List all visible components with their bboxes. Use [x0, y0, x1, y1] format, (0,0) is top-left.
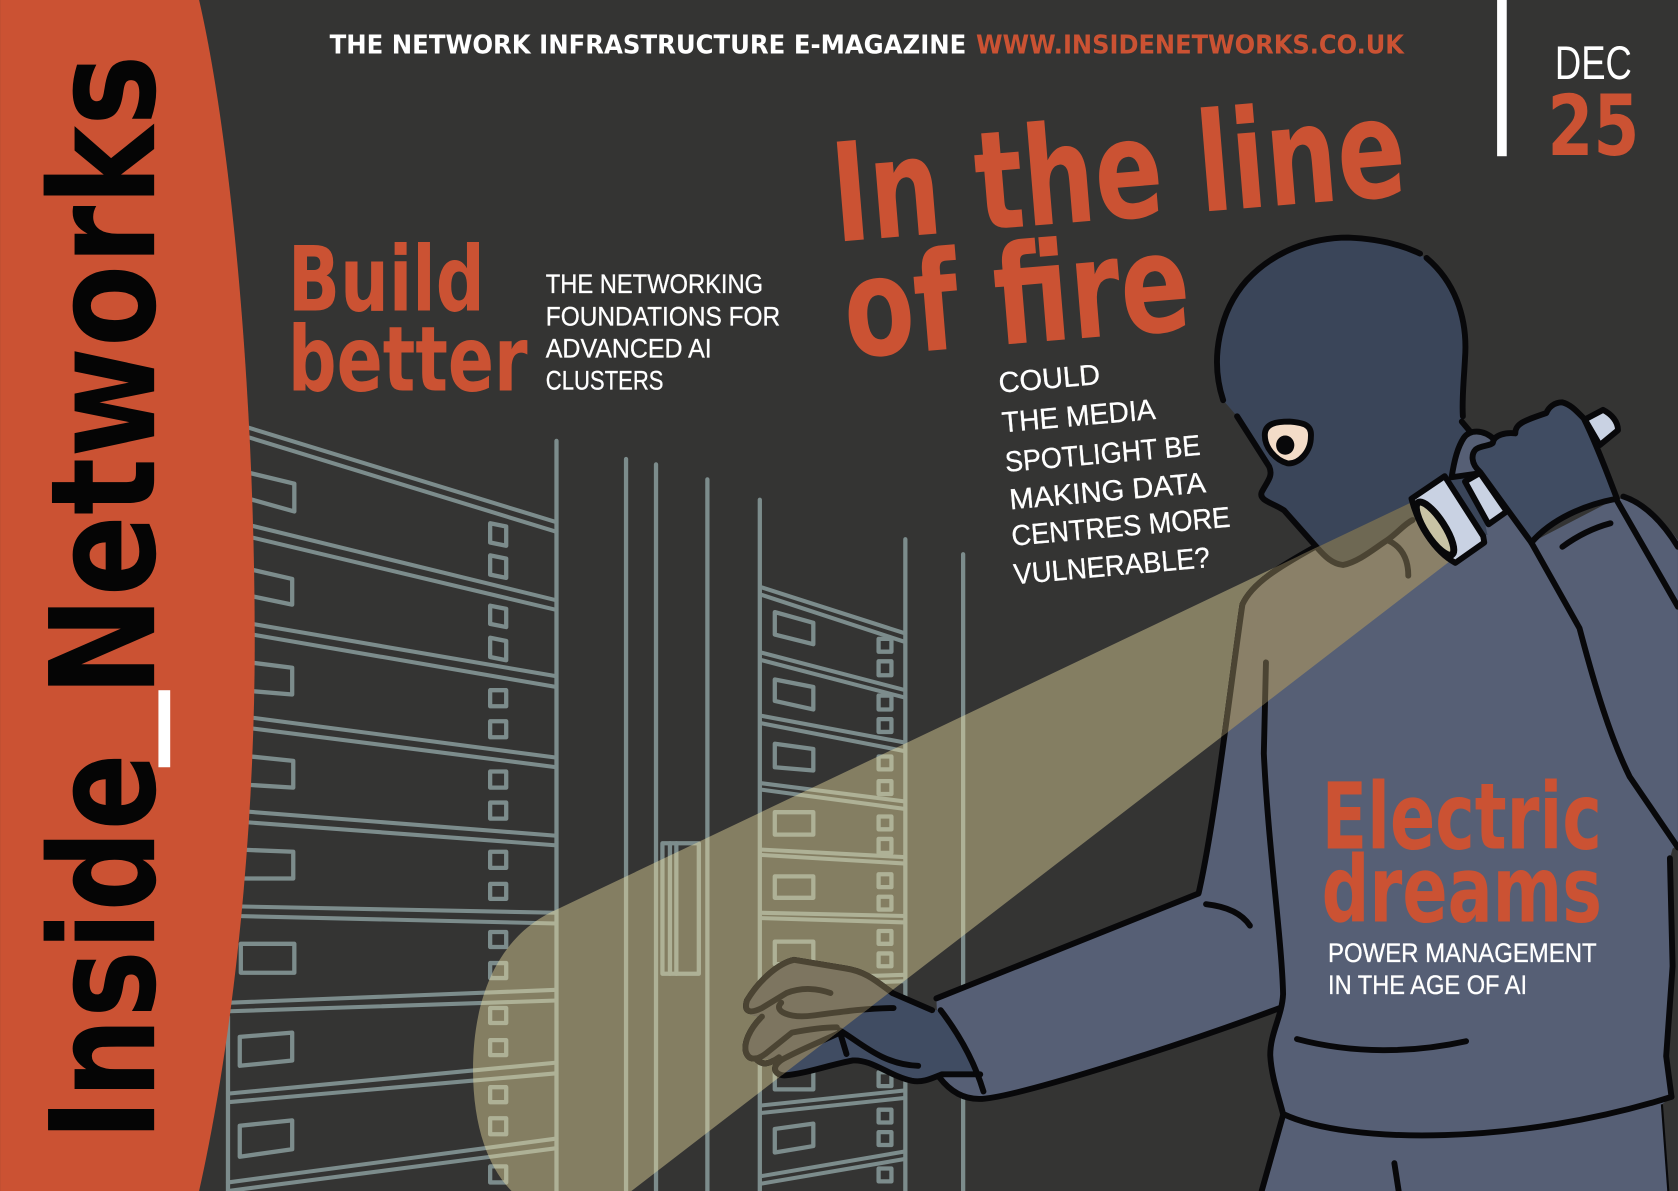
masked burglar figure — [745, 238, 1678, 1191]
feature strapline: AI clusters: FOUNDATIONS FOR — [546, 301, 780, 331]
torch light beam — [473, 501, 1453, 1191]
header strapline: WWW.INSIDENETWORKS.CO.UK — [976, 31, 1405, 61]
cover story strapline: MAKING DATA — [1008, 467, 1208, 516]
feature strapline: AI clusters: THE NETWORKING — [546, 269, 763, 299]
gloved fist, raised sleeve and torch — [1410, 402, 1618, 563]
feature: Build better: Build — [288, 228, 485, 332]
feature strapline: AI clusters: CLUSTERS — [546, 366, 664, 396]
masthead: Inside_Networks — [20, 55, 189, 1141]
feature strapline: AI clusters — [546, 269, 780, 396]
feature strapline: power management: POWER MANAGEMENT — [1328, 938, 1597, 968]
left server rack — [228, 427, 556, 1191]
feature: Build better — [288, 228, 528, 413]
figure lit by the beam — [742, 503, 1448, 1078]
cover headline: of fire — [837, 203, 1196, 390]
header strapline — [330, 31, 1405, 61]
issue date: 25 — [1547, 78, 1639, 175]
cover story strapline: COULD — [997, 359, 1101, 400]
cover story strapline: THE MEDIA — [1001, 394, 1158, 439]
cover story strapline: SPOTLIGHT BE — [1004, 430, 1202, 479]
red masthead panel — [0, 0, 255, 1191]
cover headline: In the line — [825, 69, 1411, 275]
centre uprights and door handle — [626, 459, 707, 1191]
masthead: Inside_Networks: Inside — [20, 753, 189, 1141]
feature: Electric dreams — [1322, 764, 1602, 943]
cover story strapline: CENTRES MORE — [1010, 502, 1231, 553]
header strapline: THE NETWORK INFRASTRUCTURE E-MAGAZINE — [330, 31, 966, 61]
feature: Build better: better — [288, 309, 528, 413]
issue date — [1497, 0, 1639, 175]
feature strapline: power management — [1328, 938, 1597, 1000]
issue date: DEC — [1555, 36, 1632, 89]
right server rack — [760, 500, 963, 1191]
cover story strapline: VULNERABLE? — [1012, 542, 1211, 591]
cover headline — [825, 69, 1411, 390]
server racks illustration — [228, 427, 963, 1191]
feature strapline: AI clusters: ADVANCED AI — [546, 333, 712, 363]
cover story strapline — [997, 359, 1231, 591]
feature strapline: power management: IN THE AGE OF AI — [1328, 970, 1527, 1000]
